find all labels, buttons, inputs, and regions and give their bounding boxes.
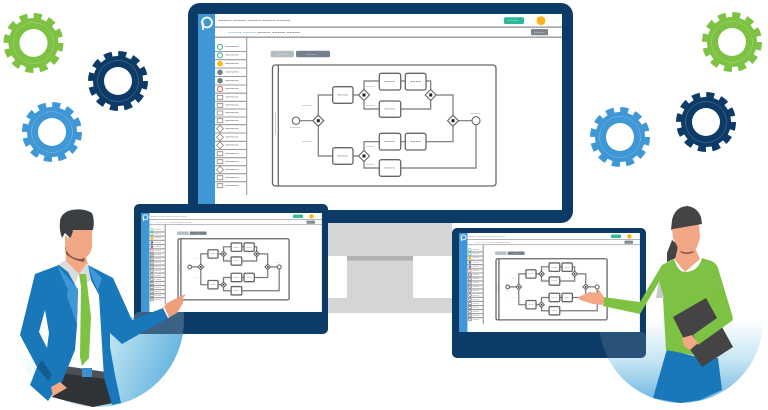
sidebar list: ~~~~~ xyxy=(225,94,239,100)
skirt xyxy=(653,349,722,403)
sidebar list: ~~~~~ xyxy=(225,78,239,83)
hair xyxy=(60,209,94,238)
right tablet frame xyxy=(452,228,646,358)
connector labels xyxy=(290,84,480,167)
right tablet monitor xyxy=(452,228,646,358)
connector labels: ~~~~~ xyxy=(290,126,300,130)
chin shadow xyxy=(680,251,694,254)
sidebar list: ~~~~~ xyxy=(225,142,239,148)
sidebar list: ~~~~~ xyxy=(225,126,239,131)
sidebar list: ~~~~~ xyxy=(225,183,239,188)
sidebar list: ~~~~~ xyxy=(225,102,239,108)
face xyxy=(65,230,92,259)
underarm shadow xyxy=(656,280,664,298)
right lapel xyxy=(88,265,102,296)
neck shadow xyxy=(65,246,85,262)
sweater xyxy=(603,258,733,355)
neck xyxy=(65,235,88,274)
sidebar list: ~~~~~ xyxy=(225,44,239,49)
yellow status dot xyxy=(536,16,546,25)
folder hand xyxy=(682,335,698,350)
process diagram xyxy=(272,65,496,186)
jacket left panel xyxy=(20,265,78,401)
ponytail xyxy=(667,240,680,262)
breadcrumb text: ~~~~~ ~~~~~ xyxy=(228,30,256,35)
diagram tabs xyxy=(271,51,330,57)
connector labels: ~~~~ xyxy=(366,145,374,149)
blue circle behind man xyxy=(24,317,183,407)
breadcrumb text: ~~~~~ ~~~~~ ~~~~~ xyxy=(257,30,300,35)
connector labels: ~~~~~ xyxy=(470,112,480,116)
gear: navy top left xyxy=(91,54,145,108)
left tablet monitor xyxy=(134,204,328,334)
sidebar strip xyxy=(198,14,215,210)
sidebar list: ~~~~~ xyxy=(225,151,239,156)
pointing hand xyxy=(163,294,186,318)
task boxes xyxy=(333,73,426,176)
task boxes: ~~~~ xyxy=(337,92,348,98)
diagram tabs: ~~~~~ xyxy=(306,52,316,56)
swimlane frame: ~~~~~ ~~~~~ xyxy=(274,112,278,134)
right tablet screen xyxy=(459,233,640,332)
main monitor xyxy=(188,3,573,223)
header bars xyxy=(215,26,562,38)
task boxes: ~~~~ xyxy=(410,79,421,84)
folder xyxy=(673,298,733,367)
task boxes: ~~~~ xyxy=(410,139,421,144)
left tablet screen xyxy=(141,213,322,312)
trousers xyxy=(52,373,113,407)
sidebar list: ~~~~~ xyxy=(225,175,239,180)
gear: blue right xyxy=(593,110,647,164)
collar xyxy=(58,260,92,288)
face xyxy=(672,223,700,253)
breadcrumb text xyxy=(228,30,300,35)
gear: green top right xyxy=(705,15,759,69)
jacket hem shadow xyxy=(37,360,52,381)
task boxes: ~~~~ xyxy=(337,154,348,158)
sidebar list: ~~~~~ xyxy=(225,86,239,91)
gear: blue left xyxy=(25,105,79,159)
task boxes: ~~~~ xyxy=(384,165,395,170)
pointing hand xyxy=(578,287,604,305)
blue circle behind woman xyxy=(608,326,762,403)
pocket hand xyxy=(51,382,67,396)
man xyxy=(20,209,186,407)
grey button xyxy=(531,29,548,35)
connector labels: ~~~~~ xyxy=(302,140,312,144)
sidebar list: ~~~~~ xyxy=(225,159,239,164)
start and end events xyxy=(292,117,480,125)
teal button: ~~~~~ xyxy=(508,19,518,23)
monitor screen xyxy=(198,14,562,210)
sidebar list: ~~~~~ xyxy=(225,110,239,115)
forearm xyxy=(693,285,733,345)
connector labels: ~~~~ xyxy=(366,84,374,88)
task boxes: ~~~~ xyxy=(384,106,395,112)
task boxes: ~~~~ xyxy=(384,139,395,144)
gateways xyxy=(313,90,458,162)
left lapel xyxy=(57,265,78,325)
sidebar list: ~~~~~ xyxy=(225,61,239,66)
sidebar list: ~~~~~ xyxy=(225,70,239,74)
sidebar list: ~~~~~ xyxy=(225,167,239,172)
jacket right panel and arm xyxy=(88,265,168,405)
gear: navy right xyxy=(679,95,733,149)
swimlane frame xyxy=(272,65,496,186)
left tablet frame xyxy=(134,204,328,334)
connector labels: ~~~~~ xyxy=(302,104,312,108)
hair xyxy=(671,206,702,230)
connectors xyxy=(300,81,476,168)
belt xyxy=(62,366,106,379)
diagram tabs: ~~~~~ xyxy=(276,52,286,56)
grey button: ~~~~~ xyxy=(534,30,544,34)
left tablet circle tint xyxy=(134,312,184,334)
jacket arm gap xyxy=(39,310,49,348)
woman xyxy=(578,206,733,403)
neck xyxy=(675,246,700,272)
logo xyxy=(202,18,212,30)
monitor stand xyxy=(327,223,452,313)
tie xyxy=(79,274,91,366)
shirt cuff xyxy=(163,308,169,318)
sidebar list: ~~~~~ xyxy=(225,134,239,140)
sidebar list: ~~~~~ xyxy=(225,52,239,58)
monitor frame xyxy=(188,3,573,223)
connector labels: ~~~~ xyxy=(366,104,374,108)
menu text: ~~~~~ ~~~~~ ~~~~~ ~~~~~ ~~~~~ xyxy=(218,18,290,23)
shirt xyxy=(63,265,105,374)
task boxes: ~~~~ xyxy=(384,79,395,84)
right tablet circle tint xyxy=(600,332,646,358)
sidebar list xyxy=(215,37,247,195)
teal button xyxy=(504,17,524,24)
connector labels: ~~~~ xyxy=(366,163,374,167)
sidebar list: ~~~~~ xyxy=(225,118,239,123)
gear: green top left xyxy=(6,16,60,70)
